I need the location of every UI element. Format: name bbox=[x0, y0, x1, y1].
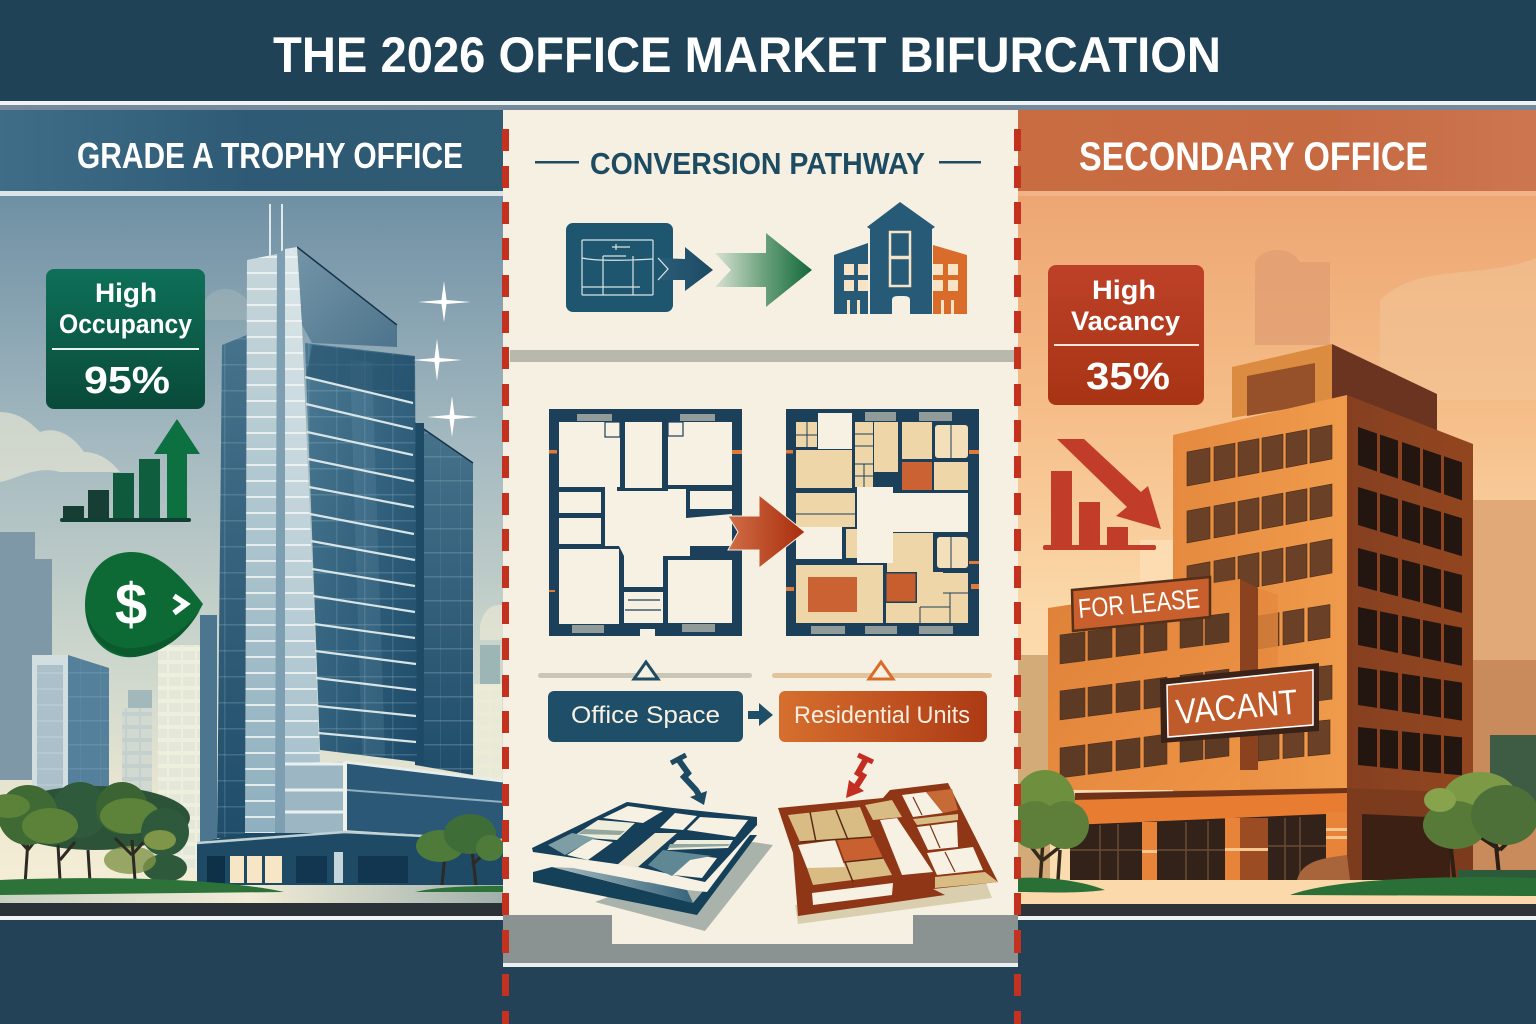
icon: dollar badge bbox=[85, 552, 203, 657]
vacancy callout: Vacancy bbox=[1071, 306, 1180, 336]
occupancy callout: High bbox=[95, 278, 157, 308]
heading band: secondary office bbox=[1018, 110, 1536, 196]
arrow: green transition bbox=[715, 233, 812, 307]
vacancy callout: 35% bbox=[1086, 356, 1170, 398]
arrow: zigzag red bbox=[846, 755, 873, 798]
occupancy callout bbox=[46, 269, 205, 409]
header band with title bbox=[0, 0, 1536, 110]
icon: blueprint with arrow bbox=[566, 223, 713, 312]
panel: secondary office bbox=[1011, 110, 1536, 920]
upper crown bbox=[297, 247, 397, 347]
trees right bbox=[1011, 770, 1536, 888]
roof box bbox=[1332, 344, 1437, 440]
isometric plan: residential bbox=[778, 783, 998, 924]
trees left bbox=[0, 782, 504, 885]
left flank bbox=[217, 335, 247, 838]
base bbox=[197, 833, 503, 885]
clouds bbox=[0, 289, 503, 640]
trophy tower bbox=[197, 204, 503, 885]
arrow: between labels bbox=[748, 703, 773, 726]
panel: conversion pathway bbox=[502, 110, 1021, 1024]
floor plan: residential bbox=[786, 409, 979, 636]
occupancy callout: Occupancy bbox=[59, 309, 192, 339]
title: THE 2026 OFFICE MARKET BIFURCATION bbox=[273, 27, 1221, 83]
side windows bbox=[1358, 427, 1462, 775]
icon: falling bar chart bbox=[1043, 439, 1161, 550]
arrow: zigzag blue bbox=[671, 755, 707, 805]
for lease sign bbox=[1072, 577, 1210, 631]
front windows bbox=[1187, 425, 1332, 761]
secondary office building bbox=[1048, 344, 1473, 880]
residential units label: Residential Units bbox=[794, 702, 970, 729]
ground bbox=[1018, 880, 1536, 904]
antennas bbox=[269, 204, 271, 264]
divider bbox=[510, 350, 1015, 362]
vacancy callout: High bbox=[1092, 275, 1156, 305]
floor bands bbox=[305, 377, 416, 742]
distant buildings bbox=[1018, 250, 1536, 894]
sky bbox=[1018, 196, 1536, 894]
central strip bbox=[245, 254, 277, 833]
office space label: Office Space bbox=[571, 702, 720, 729]
dashed red dividers bbox=[502, 129, 1021, 1024]
podium bbox=[285, 762, 345, 833]
heading: CONVERSION PATHWAY bbox=[590, 146, 925, 181]
for lease sign: FOR LEASE bbox=[1077, 583, 1201, 624]
label rules with triangles bbox=[538, 662, 992, 679]
icon: residential building bbox=[834, 202, 967, 314]
vacant sign bbox=[1160, 663, 1319, 743]
main front bbox=[1173, 395, 1347, 795]
ground floor bbox=[1075, 788, 1347, 825]
arrow: red conversion bbox=[728, 495, 805, 568]
main side bbox=[1347, 395, 1473, 795]
heading band: secondary office: SECONDARY OFFICE bbox=[1079, 135, 1428, 179]
heading band: Grade A: GRADE A TROPHY OFFICE bbox=[77, 135, 463, 176]
side tower bbox=[415, 423, 473, 775]
distant buildings bbox=[0, 532, 502, 870]
isometric plan: office bbox=[532, 802, 773, 931]
sky bbox=[0, 196, 503, 903]
vacancy callout bbox=[1048, 265, 1204, 405]
panel: Grade A trophy office bbox=[0, 110, 504, 920]
ground bbox=[0, 885, 503, 903]
glass face bbox=[305, 343, 417, 762]
low wing bbox=[1258, 588, 1278, 668]
floor plan: office bbox=[549, 409, 742, 636]
vacant sign: VACANT bbox=[1174, 682, 1299, 732]
bottom grey frame bbox=[503, 915, 1018, 963]
heading band: Grade A bbox=[0, 110, 503, 196]
icon: dollar badge: $ bbox=[115, 572, 147, 637]
occupancy callout: 95% bbox=[84, 360, 170, 402]
office space label bbox=[548, 691, 743, 742]
residential units label bbox=[779, 691, 987, 742]
white facade bbox=[285, 247, 320, 764]
icon: sparkles bbox=[413, 281, 478, 437]
icon: rising bar chart bbox=[60, 419, 200, 522]
